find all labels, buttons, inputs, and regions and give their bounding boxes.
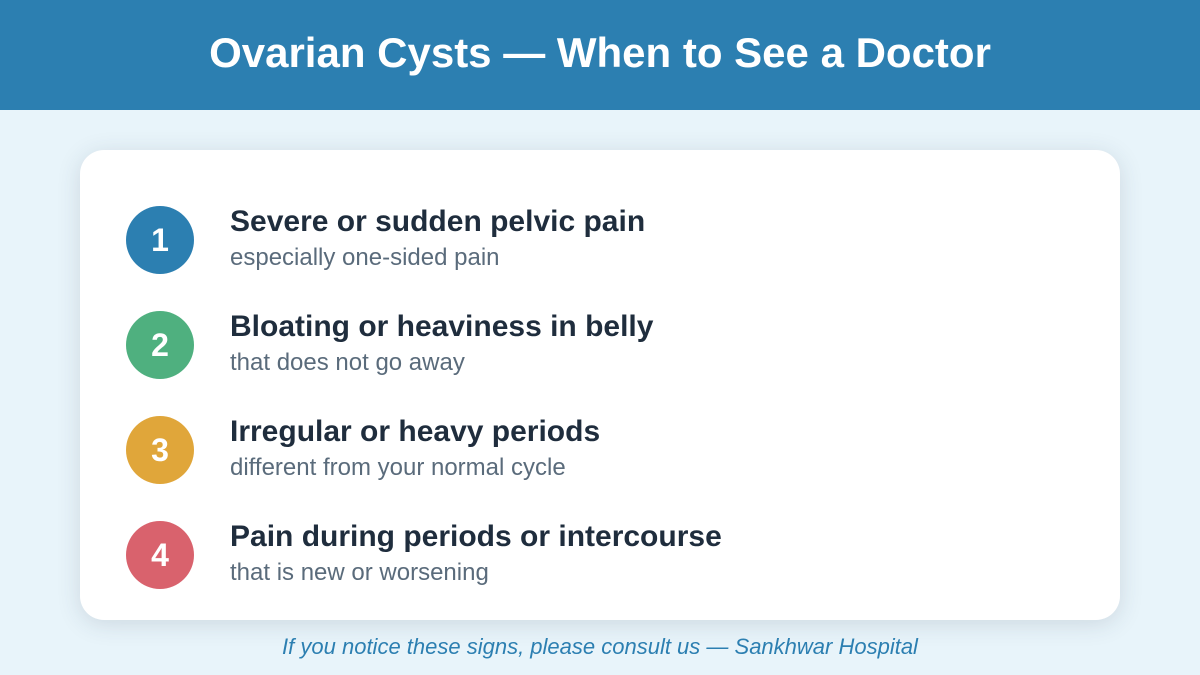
- item 2 heading: Bloating or heaviness in belly: [230, 310, 653, 343]
- item 4 description: that is new or worsening: [230, 559, 489, 586]
- item 1 heading: Severe or sudden pelvic pain: [230, 205, 645, 238]
- list item 4: [126, 520, 722, 589]
- list item 3: [126, 415, 600, 484]
- icon: number 4: [126, 521, 194, 589]
- footer note: If you notice these signs, please consult us — Sankhwar Hospital: [282, 634, 918, 659]
- item 3 heading: Irregular or heavy periods: [230, 415, 600, 448]
- list item 2: [126, 310, 654, 379]
- header band: [0, 0, 1200, 110]
- item 2 description: that does not go away: [230, 349, 465, 376]
- title: Ovarian Cysts — When to See a Doctor: [209, 29, 991, 76]
- icon: number 2: 2: [151, 327, 169, 363]
- icon: number 3: [126, 416, 194, 484]
- icon: number 2: [126, 311, 194, 379]
- panel: warning signs card: [80, 150, 1120, 620]
- icon: number 3: 3: [151, 432, 169, 468]
- icon: number 1: [126, 206, 194, 274]
- list item 1: [126, 205, 645, 274]
- icon: number 4: 4: [151, 537, 169, 573]
- item 3 description: different from your normal cycle: [230, 454, 566, 481]
- item 4 heading: Pain during periods or intercourse: [230, 520, 722, 553]
- icon: number 1: 1: [151, 222, 169, 258]
- item 1 description: especially one-sided pain: [230, 244, 500, 271]
